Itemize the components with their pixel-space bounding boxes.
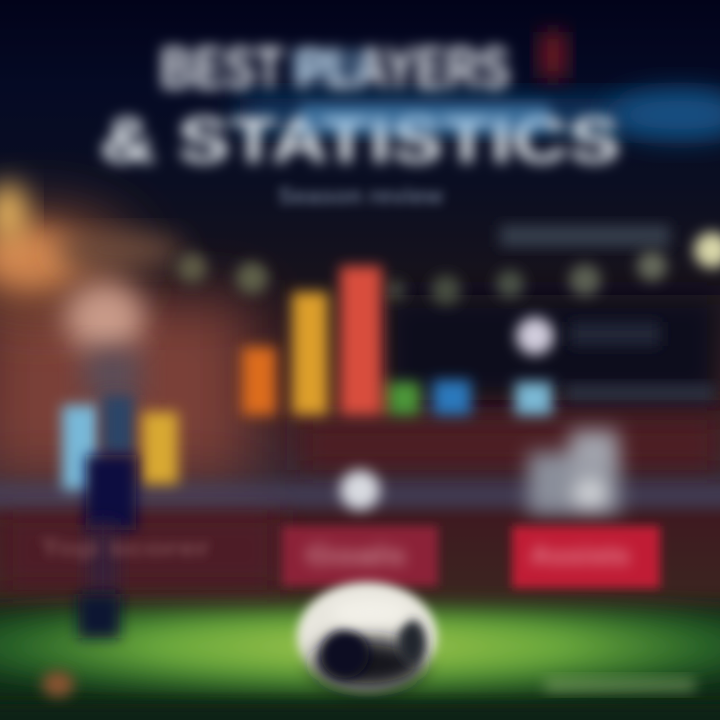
horizontal stadium band	[0, 482, 720, 508]
red stat box 2	[512, 526, 660, 588]
red stat box 1: Goals	[306, 540, 406, 570]
bar chart	[242, 266, 552, 415]
trophy	[528, 430, 620, 514]
red stat box 2: Assists	[530, 540, 630, 570]
pitch	[0, 606, 720, 720]
player figure	[62, 282, 178, 638]
legend: icon and text	[516, 317, 715, 401]
title: & STATISTICS	[100, 104, 620, 176]
title accent: red mark	[540, 32, 566, 78]
red stat box 1	[282, 526, 438, 586]
top-right text block	[500, 225, 670, 247]
soccer ball	[297, 582, 437, 690]
stadium lights glow	[0, 182, 185, 312]
subtitle: Season review	[278, 183, 443, 210]
white circle icon	[340, 470, 380, 510]
title	[100, 36, 620, 176]
left caption: Top scorer	[40, 535, 210, 562]
row of stat dots	[177, 232, 720, 305]
title: BEST PLAYERS	[160, 36, 510, 101]
